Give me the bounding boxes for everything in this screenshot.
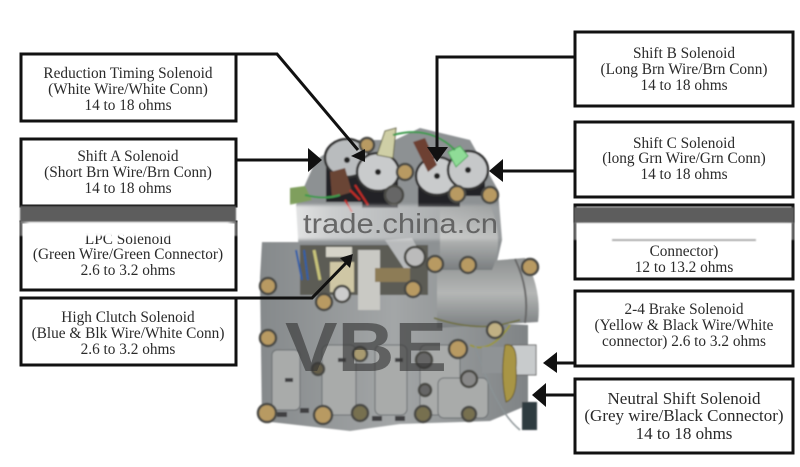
callout: Neutral Shift Solenoid: Neutral Shift Solenoid <box>608 389 761 408</box>
callout: Shift B Solenoid: 14 to 18 ohms <box>640 77 728 94</box>
arrow: Shift A <box>236 148 322 172</box>
solenoids <box>325 139 488 208</box>
callout: partly obscured solenoid, 12 to 13.2 ohms: 12 to 13.2 ohms <box>635 259 733 276</box>
callout: Shift A Solenoid: 14 to 18 ohms <box>84 180 172 197</box>
recess marks <box>277 358 405 421</box>
callout: 2-4 Brake Solenoid: 2-4 Brake Solenoid <box>625 301 744 318</box>
callout: LPC Solenoid: LPC Solenoid <box>85 231 171 248</box>
upper plate <box>296 128 502 270</box>
callout: partly obscured solenoid, 12 to 13.2 ohms: Connector) <box>650 243 718 260</box>
callout: Shift A Solenoid: Shift A Solenoid <box>77 148 179 165</box>
callout: Shift A Solenoid <box>21 139 236 206</box>
callout: Shift B Solenoid <box>575 32 793 106</box>
callout: LPC Solenoid: (Green Wire/Green Connector) <box>33 246 223 263</box>
callout: Neutral Shift Solenoid: 14 to 18 ohms <box>636 424 732 443</box>
callout: High Clutch Solenoid: 2.6 to 3.2 ohms <box>81 341 175 358</box>
watermark band: trade.china.cn <box>258 205 502 240</box>
callout: 2-4 Brake Solenoid <box>575 291 793 366</box>
upper throttle cylinder <box>440 205 498 270</box>
callout: partly obscured solenoid, 12 to 13.2 ohms <box>575 205 793 279</box>
callout: High Clutch Solenoid: (Blue & Blk Wire/White Conn) <box>32 325 224 342</box>
arrow: Shift C <box>489 159 574 182</box>
connectors and wires <box>377 128 396 158</box>
callout: Neutral Shift Solenoid <box>575 379 793 453</box>
arrow: LPC / High Clutch leader <box>236 254 353 298</box>
watermark: VBE: VBE <box>285 308 447 386</box>
callout: Reduction Timing Solenoid <box>21 54 236 121</box>
callout: High Clutch Solenoid: High Clutch Solenoid <box>61 309 195 326</box>
large cylinder <box>437 258 539 328</box>
callout: Shift C Solenoid: 14 to 18 ohms <box>640 166 728 183</box>
dark mechanism <box>300 245 428 295</box>
valve body photo <box>258 128 539 431</box>
arrow: Neutral Shift <box>532 383 574 407</box>
watermark band: trade.china.cn: trade.china.cn <box>303 208 498 239</box>
callout: LPC Solenoid: 2.6 to 3.2 ohms <box>81 262 175 279</box>
callout: Shift C Solenoid: Shift C Solenoid <box>633 135 735 152</box>
lower casting channels <box>272 345 488 418</box>
callout: Shift C Solenoid: (long Grn Wire/Grn Conn) <box>602 150 766 167</box>
callout: Reduction Timing Solenoid: Reduction Timing Solenoid <box>43 65 213 82</box>
arrow: Reduction Timing to solenoid <box>236 54 365 162</box>
black lower solenoids and wires <box>434 318 520 326</box>
callout: Reduction Timing Solenoid: (White Wire/White Conn) <box>48 81 208 98</box>
arrow: Shift B <box>427 57 574 162</box>
callout: 2-4 Brake Solenoid: connector) 2.6 to 3.2 ohms <box>602 333 766 350</box>
arrow: 2-4 Brake <box>543 352 574 373</box>
callout: Shift B Solenoid: (Long Brn Wire/Brn Conn) <box>601 61 767 78</box>
callout: High Clutch Solenoid <box>21 298 236 365</box>
callout: Shift C Solenoid <box>575 122 793 197</box>
lower casting <box>260 242 528 431</box>
watermark: right grey band <box>570 207 798 241</box>
watermark: left grey band <box>16 206 241 236</box>
callout: Neutral Shift Solenoid: (Grey wire/Black Connector) <box>584 406 784 425</box>
callout: LPC Solenoid <box>21 222 236 290</box>
callout: Reduction Timing Solenoid: 14 to 18 ohms <box>84 97 172 114</box>
callout: Shift A Solenoid: (Short Brn Wire/Brn Conn) <box>44 164 212 181</box>
bolts <box>258 138 538 424</box>
callout: Shift B Solenoid: Shift B Solenoid <box>633 45 735 62</box>
callout: 2-4 Brake Solenoid: (Yellow & Black Wire/White <box>595 317 774 334</box>
